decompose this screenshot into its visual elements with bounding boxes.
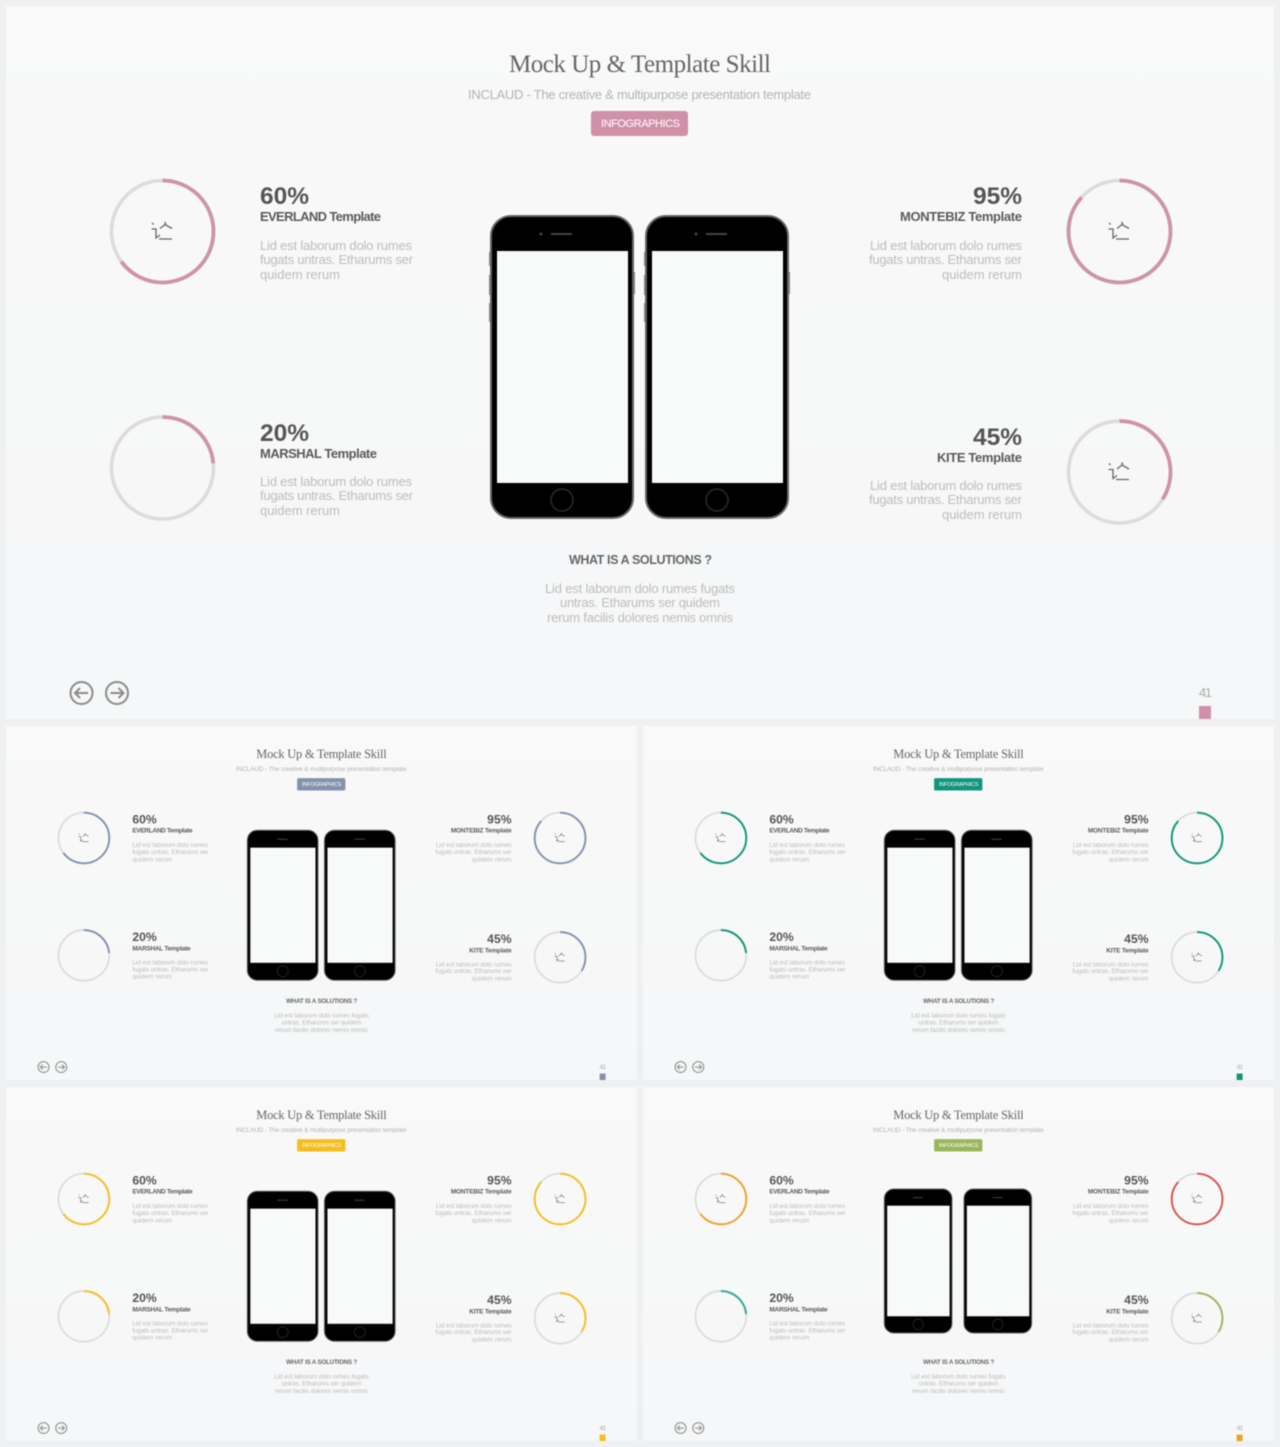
stat: everland 60%: fugats untras. Etharums ser <box>132 1210 209 1217</box>
phones mockup <box>884 830 1032 980</box>
stat: kite 45%: Lid est laborum dolo rumes <box>1073 1322 1149 1329</box>
stat: kite 45%: 45% <box>487 1293 512 1307</box>
stat: montebiz 95%: Lid est laborum dolo rumes <box>870 238 1022 253</box>
stat: everland 60% <box>695 1173 846 1225</box>
stat: kite 45%: Lid est laborum dolo rumes <box>1073 961 1149 968</box>
solutions text: untras. Etharums ser quidem <box>282 1019 361 1026</box>
subtitle: INCLAUD - The creative & multipurpose presentation template <box>236 766 407 773</box>
solutions text: rerum facilis dolores nemis omnis <box>275 1388 368 1395</box>
stat: everland 60%: Lid est laborum dolo rumes <box>769 1203 845 1210</box>
badge: infographics: INFOGRAPHICS <box>302 782 342 788</box>
stat: marshal 20%: MARSHAL Template <box>769 945 828 952</box>
badge: infographics <box>591 111 688 136</box>
solutions text: rerum facilis dolores nemis omnis <box>912 1388 1005 1395</box>
stat: montebiz 95%: fugats untras. Etharums ser <box>1072 849 1149 856</box>
solutions text <box>911 998 1006 1034</box>
stat: everland 60%: 60% <box>769 812 794 826</box>
stat: kite 45%: KITE Template <box>937 450 1022 465</box>
stat: montebiz 95%: fugats untras. Etharums ser <box>435 1210 512 1217</box>
stat: marshal 20%: 20% <box>769 1291 794 1305</box>
stat: kite 45%: Lid est laborum dolo rumes <box>436 1322 512 1329</box>
stat: marshal 20%: MARSHAL Template <box>260 446 377 461</box>
stat: montebiz 95%: MONTEBIZ Template <box>1088 828 1149 835</box>
page number: 41 <box>600 1425 607 1432</box>
stat: everland 60%: EVERLAND Template <box>769 1189 830 1196</box>
solutions text <box>545 553 736 625</box>
stat: everland 60%: EVERLAND Template <box>260 209 381 224</box>
stat: kite 45%: Lid est laborum dolo rumes <box>436 961 512 968</box>
stat: montebiz 95% <box>1072 812 1222 864</box>
stat: marshal 20%: Lid est laborum dolo rumes <box>260 474 412 489</box>
stat: everland 60%: quidem rerum <box>769 1218 809 1225</box>
solutions text: rerum facilis dolores nemis omnis <box>547 610 734 625</box>
badge: infographics: INFOGRAPHICS <box>939 1143 979 1149</box>
solutions text: WHAT IS A SOLUTIONS ? <box>923 1359 995 1366</box>
stat: kite 45%: KITE Template <box>469 947 512 954</box>
stat: montebiz 95% <box>435 1173 585 1225</box>
stat: kite 45%: Lid est laborum dolo rumes <box>870 478 1022 493</box>
stat: montebiz 95%: quidem rerum <box>472 1218 512 1225</box>
solutions text <box>274 1359 369 1395</box>
stat: marshal 20%: MARSHAL Template <box>132 945 191 952</box>
stat: kite 45% <box>869 421 1170 523</box>
stat: marshal 20%: 20% <box>260 420 309 447</box>
stat: everland 60%: Lid est laborum dolo rumes <box>132 842 208 849</box>
page number <box>600 1064 607 1080</box>
stat: kite 45%: quidem rerum <box>472 976 512 983</box>
stat: montebiz 95%: Lid est laborum dolo rumes <box>1073 1203 1149 1210</box>
stat: montebiz 95%: Lid est laborum dolo rumes <box>1073 842 1149 849</box>
stat: marshal 20%: Lid est laborum dolo rumes <box>769 959 845 966</box>
nav arrows <box>38 1062 67 1073</box>
stat: montebiz 95%: MONTEBIZ Template <box>451 828 512 835</box>
stat: kite 45%: 45% <box>1124 1293 1149 1307</box>
stat: marshal 20% <box>58 930 209 981</box>
phones mockup <box>247 830 395 980</box>
stat: kite 45%: 45% <box>487 932 512 946</box>
stat: marshal 20%: Lid est laborum dolo rumes <box>132 1320 208 1327</box>
stat: montebiz 95%: fugats untras. Etharums ser <box>435 849 512 856</box>
stat: everland 60% <box>58 1173 209 1225</box>
solutions text: untras. Etharums ser quidem <box>919 1019 998 1026</box>
stat: montebiz 95%: MONTEBIZ Template <box>1088 1189 1149 1196</box>
page number <box>600 1425 607 1441</box>
subtitle: INCLAUD - The creative & multipurpose presentation template <box>236 1127 407 1134</box>
phones mockup <box>247 1191 395 1341</box>
solutions text: untras. Etharums ser quidem <box>919 1380 998 1387</box>
panel: slide multicolour <box>643 1087 1274 1441</box>
stat: marshal 20%: Lid est laborum dolo rumes <box>769 1320 845 1327</box>
stat: everland 60%: Lid est laborum dolo rumes <box>769 842 845 849</box>
stat: everland 60%: EVERLAND Template <box>132 828 193 835</box>
stat: montebiz 95%: quidem rerum <box>1109 857 1149 864</box>
stat: kite 45% <box>435 932 585 983</box>
stat: montebiz 95%: 95% <box>1124 1173 1149 1187</box>
stat: marshal 20%: MARSHAL Template <box>132 1306 191 1313</box>
stat: kite 45%: fugats untras. Etharums ser <box>435 1329 512 1336</box>
stat: montebiz 95% <box>1072 1173 1222 1225</box>
stat: everland 60%: 60% <box>769 1173 794 1187</box>
stat: montebiz 95%: fugats untras. Etharums ser <box>869 252 1023 267</box>
panel: main slide (pink) <box>6 6 1274 719</box>
stat: marshal 20%: fugats untras. Etharums ser <box>132 966 209 973</box>
page number: 41 <box>1199 685 1212 700</box>
stat: marshal 20%: quidem rerum <box>260 503 340 518</box>
solutions text: WHAT IS A SOLUTIONS ? <box>286 998 358 1005</box>
page number: 41 <box>1237 1064 1244 1071</box>
stat: everland 60%: fugats untras. Etharums ser <box>769 849 846 856</box>
stat: montebiz 95%: Lid est laborum dolo rumes <box>436 842 512 849</box>
title: Mock Up & Template Skill <box>893 747 1024 761</box>
stat: everland 60%: Lid est laborum dolo rumes <box>260 238 412 253</box>
stat: everland 60%: 60% <box>132 812 157 826</box>
title: Mock Up & Template Skill <box>256 1108 387 1122</box>
stat: montebiz 95% <box>435 812 585 864</box>
solutions text <box>274 998 369 1034</box>
stat: marshal 20%: 20% <box>132 930 157 944</box>
phones mockup <box>489 216 790 518</box>
solutions text: WHAT IS A SOLUTIONS ? <box>923 998 995 1005</box>
stat: everland 60%: EVERLAND Template <box>769 828 830 835</box>
stat: kite 45%: KITE Template <box>1106 1308 1149 1315</box>
badge: infographics <box>934 1139 982 1152</box>
stat: marshal 20%: fugats untras. Etharums ser <box>769 966 846 973</box>
subtitle: INCLAUD - The creative & multipurpose presentation template <box>468 87 811 102</box>
stat: kite 45%: fugats untras. Etharums ser <box>1072 1329 1149 1336</box>
stat: kite 45%: fugats untras. Etharums ser <box>435 968 512 975</box>
stat: marshal 20%: 20% <box>769 930 794 944</box>
stat: everland 60%: 60% <box>132 1173 157 1187</box>
stat: montebiz 95%: fugats untras. Etharums ser <box>1072 1210 1149 1217</box>
stat: kite 45%: KITE Template <box>469 1308 512 1315</box>
stat: everland 60% <box>695 812 846 864</box>
badge: infographics: INFOGRAPHICS <box>939 782 979 788</box>
solutions text: rerum facilis dolores nemis omnis <box>275 1027 368 1034</box>
stat: montebiz 95% <box>869 180 1170 282</box>
stat: montebiz 95%: quidem rerum <box>472 857 512 864</box>
solutions text: WHAT IS A SOLUTIONS ? <box>286 1359 358 1366</box>
title: Mock Up & Template Skill <box>256 747 387 761</box>
stat: marshal 20% <box>695 930 846 981</box>
phone right, multicolour slide <box>964 1189 1032 1333</box>
stat: marshal 20%: Lid est laborum dolo rumes <box>132 959 208 966</box>
badge: infographics: INFOGRAPHICS <box>302 1143 342 1149</box>
stat: kite 45% <box>435 1293 585 1344</box>
stat: montebiz 95%: MONTEBIZ Template <box>900 209 1022 224</box>
stat: everland 60% <box>58 812 209 864</box>
stat: kite 45% <box>1072 932 1222 983</box>
stat: montebiz 95%: 95% <box>1124 812 1149 826</box>
stat: everland 60% <box>112 180 414 282</box>
solutions text: rerum facilis dolores nemis omnis <box>912 1027 1005 1034</box>
nav arrows <box>675 1423 704 1434</box>
stat: kite 45%: fugats untras. Etharums ser <box>869 492 1023 507</box>
stat: everland 60%: EVERLAND Template <box>132 1189 193 1196</box>
stat: everland 60%: quidem rerum <box>132 1218 172 1225</box>
solutions text: WHAT IS A SOLUTIONS ? <box>569 553 712 567</box>
stat: kite 45%: 45% <box>1124 932 1149 946</box>
title: Mock Up & Template Skill <box>509 51 771 78</box>
stat: kite 45% <box>1072 1293 1222 1344</box>
nav arrows <box>38 1423 67 1434</box>
solutions text: Lid est laborum dolo rumes fugats <box>911 1012 1006 1019</box>
stat: montebiz 95%: quidem rerum <box>1109 1218 1149 1225</box>
badge: infographics <box>297 1139 345 1152</box>
stat: kite 45%: quidem rerum <box>472 1337 512 1344</box>
stat: everland 60%: quidem rerum <box>260 267 340 282</box>
stat: marshal 20%: quidem rerum <box>132 974 172 981</box>
solutions text: Lid est laborum dolo rumes fugats <box>545 581 736 596</box>
stat: montebiz 95%: MONTEBIZ Template <box>451 1189 512 1196</box>
solutions text: Lid est laborum dolo rumes fugats <box>911 1373 1006 1380</box>
stat: kite 45%: fugats untras. Etharums ser <box>1072 968 1149 975</box>
stat: kite 45%: quidem rerum <box>1109 1337 1149 1344</box>
stat: everland 60%: 60% <box>260 183 309 210</box>
stat: marshal 20% <box>58 1291 209 1342</box>
stat: marshal 20%: MARSHAL Template <box>769 1306 828 1313</box>
solutions text: untras. Etharums ser quidem <box>282 1380 361 1387</box>
panel: slide blue <box>6 726 637 1080</box>
solutions text: untras. Etharums ser quidem <box>560 595 720 610</box>
stat: everland 60%: Lid est laborum dolo rumes <box>132 1203 208 1210</box>
subtitle: INCLAUD - The creative & multipurpose presentation template <box>873 1127 1044 1134</box>
nav arrows <box>675 1062 704 1073</box>
stat: everland 60%: fugats untras. Etharums ser <box>769 1210 846 1217</box>
stat: everland 60%: quidem rerum <box>769 857 809 864</box>
subtitle: INCLAUD - The creative & multipurpose presentation template <box>873 766 1044 773</box>
stat: montebiz 95%: 95% <box>487 812 512 826</box>
stat: marshal 20%: 20% <box>132 1291 157 1305</box>
page number <box>1199 685 1212 719</box>
panel: slide yellow <box>6 1087 637 1441</box>
stat: montebiz 95%: quidem rerum <box>942 267 1022 282</box>
phone left, multicolour slide <box>884 1189 952 1333</box>
page number: 41 <box>1237 1425 1244 1432</box>
stat: montebiz 95%: 95% <box>487 1173 512 1187</box>
stat: everland 60%: fugats untras. Etharums ser <box>132 849 209 856</box>
badge: infographics <box>934 778 982 791</box>
stat: montebiz 95%: 95% <box>973 183 1022 210</box>
stat: marshal 20% <box>112 417 414 519</box>
badge: infographics: INFOGRAPHICS <box>601 118 680 130</box>
page number: 41 <box>600 1064 607 1071</box>
stat: kite 45%: quidem rerum <box>942 507 1022 522</box>
stat: kite 45%: KITE Template <box>1106 947 1149 954</box>
stat: marshal 20%: quidem rerum <box>132 1335 172 1342</box>
badge: infographics <box>297 778 345 791</box>
stat: everland 60%: fugats untras. Etharums ser <box>260 252 414 267</box>
solutions text: Lid est laborum dolo rumes fugats <box>274 1012 369 1019</box>
stat: marshal 20%: fugats untras. Etharums ser <box>260 488 414 503</box>
stat: montebiz 95%: Lid est laborum dolo rumes <box>436 1203 512 1210</box>
stat: marshal 20%: quidem rerum <box>769 974 809 981</box>
stat: marshal 20% <box>695 1291 846 1342</box>
solutions text: Lid est laborum dolo rumes fugats <box>274 1373 369 1380</box>
stat: marshal 20%: fugats untras. Etharums ser <box>769 1327 846 1334</box>
nav arrows <box>70 682 128 704</box>
solutions text <box>911 1359 1006 1395</box>
stat: marshal 20%: fugats untras. Etharums ser <box>132 1327 209 1334</box>
stat: everland 60%: quidem rerum <box>132 857 172 864</box>
stat: marshal 20%: quidem rerum <box>769 1335 809 1342</box>
page number <box>1237 1064 1244 1080</box>
panel: slide teal <box>643 726 1274 1080</box>
stat: kite 45%: quidem rerum <box>1109 976 1149 983</box>
stat: kite 45%: 45% <box>973 424 1022 451</box>
title: Mock Up & Template Skill <box>893 1108 1024 1122</box>
page number <box>1237 1425 1244 1441</box>
